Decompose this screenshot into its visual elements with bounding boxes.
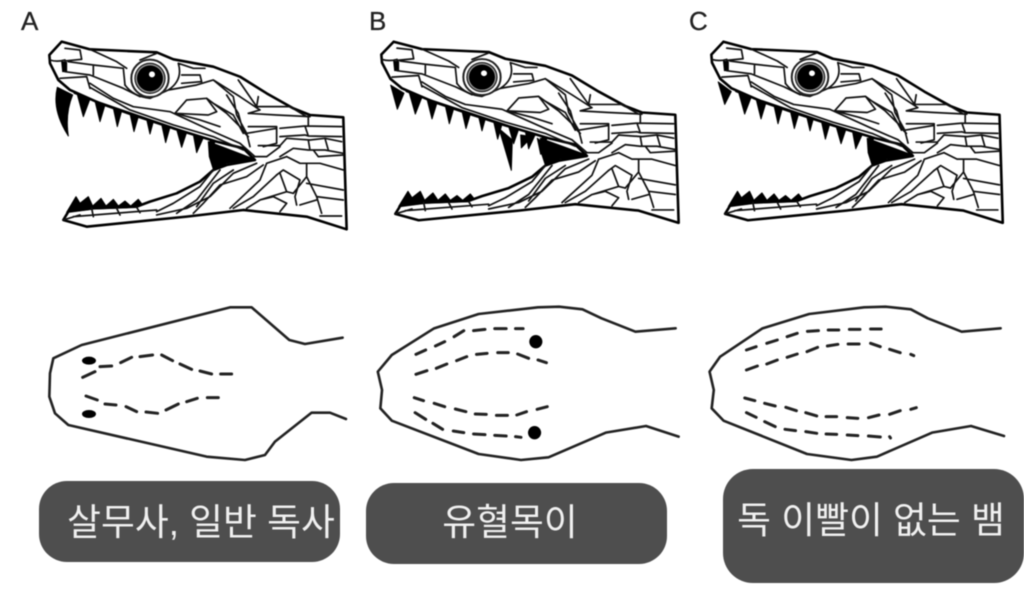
- snake head C: no fangs: [711, 42, 1003, 223]
- caption pill A: [39, 481, 340, 562]
- snake head A: long front fang: [49, 42, 347, 229]
- caption pill C: 독 이빨이 없는 뱀: [737, 500, 1005, 541]
- snake head B: rear fang: [381, 42, 679, 223]
- caption pill B: [366, 483, 667, 564]
- caption pill C: [723, 469, 1024, 583]
- caption pill B: 유혈목이: [442, 502, 578, 543]
- label C: C: [689, 6, 708, 36]
- skull underside B: two rear fang dots: [378, 307, 679, 460]
- label B: B: [369, 6, 386, 36]
- icon: front fang: [56, 87, 73, 136]
- skull underside A: two front fang dots: [49, 307, 346, 460]
- icon: rear fangs and front tooth cluster: [391, 85, 547, 170]
- caption pill A: 살무사, 일반 독사: [67, 502, 335, 543]
- skull underside C: no fangs: [710, 307, 1004, 460]
- label A: A: [21, 6, 39, 36]
- icon: front tooth cluster: [718, 82, 731, 104]
